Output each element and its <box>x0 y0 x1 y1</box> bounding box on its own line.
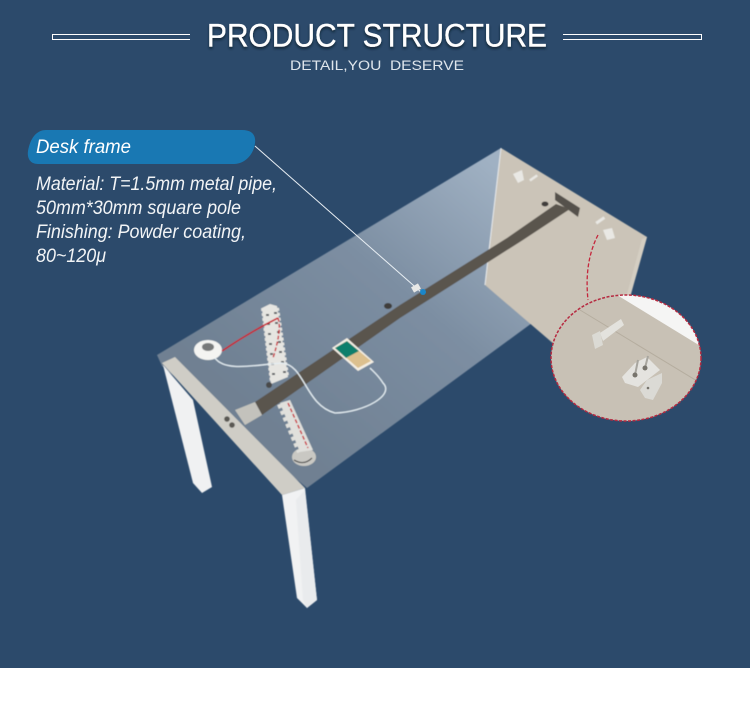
phone <box>332 338 374 371</box>
detail magnifier <box>551 295 702 421</box>
pill label: Desk frame <box>36 137 131 158</box>
lower grommet <box>292 448 316 466</box>
title: PRODUCT STRUCTURE <box>207 18 547 54</box>
material description: 50mm*30mm square pole <box>36 197 241 219</box>
subtitle: DETAIL,YOU DESERVE <box>290 58 464 73</box>
label pill <box>28 130 255 164</box>
bar connector <box>224 402 262 428</box>
material description: Material: T=1.5mm metal pipe, <box>36 173 277 195</box>
bar clips <box>384 202 548 309</box>
upper grommet <box>194 340 222 360</box>
magnifier screw <box>592 319 624 349</box>
magnifier bracket <box>622 356 662 400</box>
front rail <box>162 357 305 495</box>
red cable <box>222 318 308 448</box>
panel slot <box>555 192 580 217</box>
magnifier white corner <box>617 295 702 347</box>
material description: 80~120μ <box>36 245 106 267</box>
title rule right <box>563 34 702 40</box>
red dashed connector <box>587 235 598 300</box>
white cable <box>215 358 386 413</box>
material description: Finishing: Powder coating, <box>36 221 246 243</box>
power strip lower <box>280 400 313 452</box>
material description <box>36 173 277 267</box>
wood end panel <box>485 148 647 345</box>
leader marker <box>411 283 426 295</box>
title rule left <box>52 34 190 40</box>
frame bar <box>255 204 570 415</box>
power strip upper <box>262 304 288 388</box>
glass desktop <box>157 148 532 488</box>
panel brackets <box>513 170 615 240</box>
leader line <box>255 146 421 292</box>
left leg <box>163 365 212 493</box>
right leg <box>282 488 317 608</box>
desk illustration <box>157 148 647 608</box>
